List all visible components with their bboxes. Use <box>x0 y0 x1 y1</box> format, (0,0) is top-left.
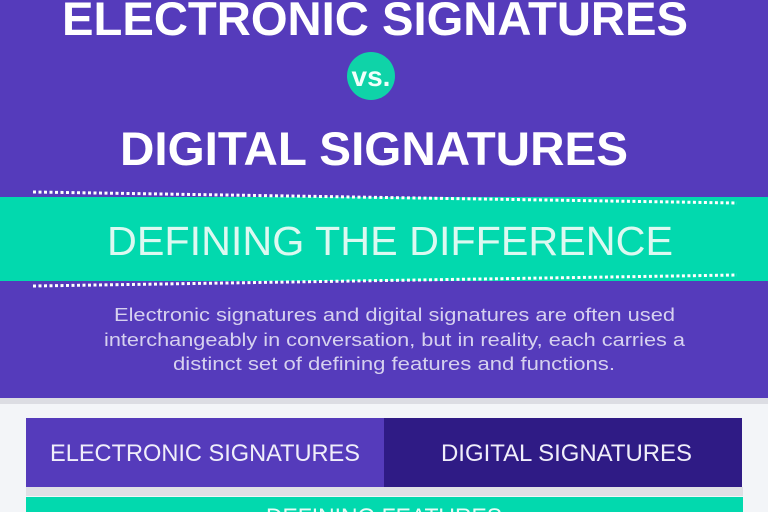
intro text block: interchangeably in conversation, but in reality, each carries a <box>104 330 686 350</box>
panel: comparison table <box>26 418 743 512</box>
intro text block: Electronic signatures and digital signatures are often used <box>114 305 675 325</box>
column header: electronic signatures: ELECTRONIC SIGNATURES <box>50 440 360 467</box>
panel: purple hero background <box>0 0 768 398</box>
banner: defining the difference <box>0 192 768 286</box>
banner: defining the difference: DEFINING THE DIFFERENCE <box>107 218 673 264</box>
intro text block <box>104 305 686 374</box>
intro text block: distinct set of defining features and functions. <box>173 354 615 374</box>
column header: electronic signatures <box>26 418 384 487</box>
title: digital signatures: DIGITAL SIGNATURES <box>120 122 628 175</box>
badge: vs.: vs. <box>352 61 390 92</box>
badge: vs. <box>347 52 395 100</box>
column header: digital signatures <box>384 418 742 487</box>
column header: digital signatures: DIGITAL SIGNATURES <box>441 440 692 467</box>
section bar: defining features <box>26 497 743 512</box>
